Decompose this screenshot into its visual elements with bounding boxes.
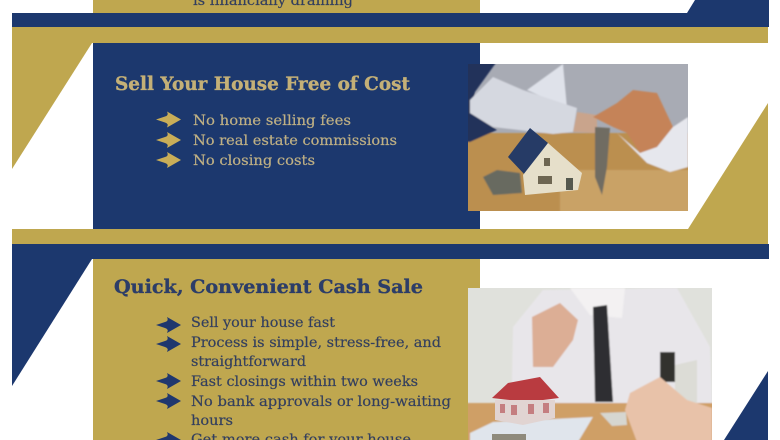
navy band lower	[12, 244, 769, 259]
icon: arrow	[156, 112, 181, 128]
navy left triangle	[12, 259, 92, 386]
icon: arrow	[156, 132, 181, 148]
top gold panel	[93, 0, 480, 13]
gold right triangle	[688, 103, 768, 229]
gold band lower	[12, 229, 768, 244]
gold panel	[93, 259, 480, 440]
list item: Process is simple, stress-free, and	[191, 335, 441, 351]
list item: No bank approvals or long-waiting	[191, 394, 451, 410]
list item: No home selling fees	[193, 113, 351, 129]
icon: arrow	[156, 393, 181, 409]
photo: hand holding keys with model house	[468, 64, 688, 211]
navy band	[12, 13, 769, 27]
navy panel	[93, 43, 480, 229]
list item: No real estate commissions	[193, 133, 397, 149]
heading: sell free of cost: Sell Your House Free of Cost	[115, 73, 410, 95]
list: cash sale benefits	[156, 315, 451, 440]
list item continuation: hours	[191, 413, 233, 429]
list item: No closing costs	[193, 153, 315, 169]
photo: businessman with red model house	[460, 288, 720, 440]
icon: arrow	[156, 336, 181, 352]
icon: arrow	[156, 317, 181, 333]
icon: arrow	[156, 373, 181, 389]
list item: Fast closings within two weeks	[191, 374, 418, 390]
icon: arrow	[156, 432, 181, 440]
list item continuation: straightforward	[191, 354, 306, 370]
list: free of cost benefits	[156, 112, 397, 169]
gold band	[12, 27, 768, 43]
navy right triangle	[724, 371, 768, 440]
list item: Sell your house fast	[191, 315, 335, 331]
gold left triangle	[12, 43, 92, 169]
heading: quick cash sale: Quick, Convenient Cash Sale	[114, 276, 423, 298]
icon: arrow	[156, 152, 181, 168]
top right navy wedge	[687, 0, 769, 13]
